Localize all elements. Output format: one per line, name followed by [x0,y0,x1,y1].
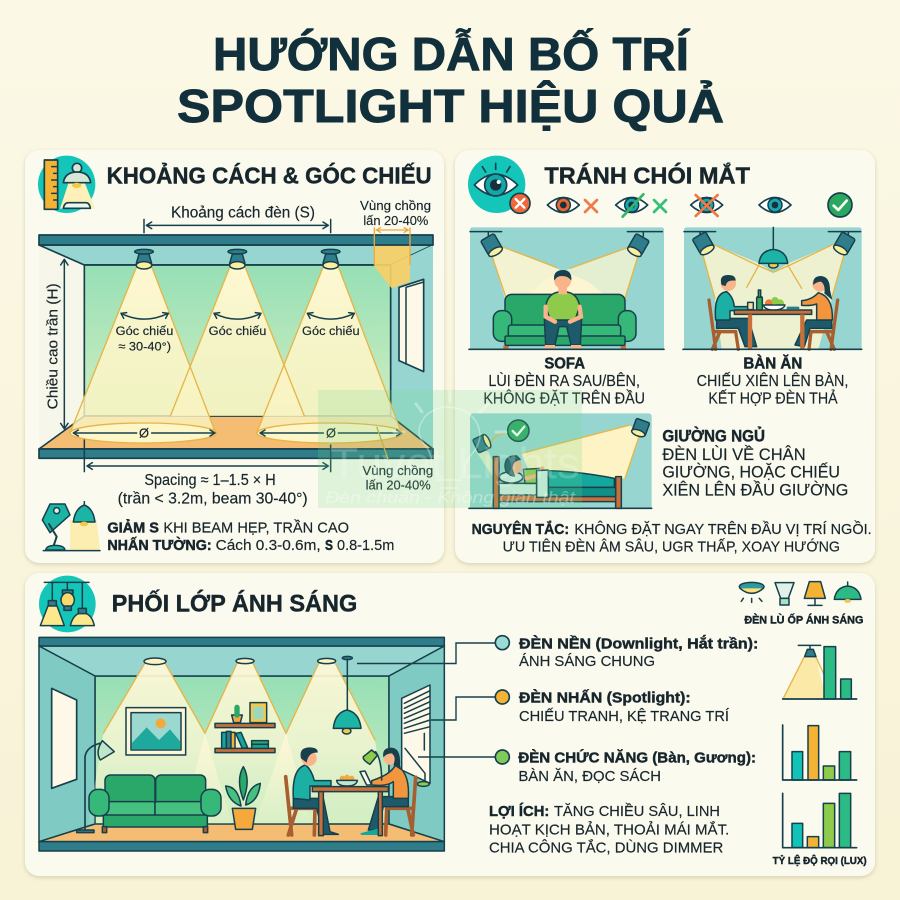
legend: đèn chức năng: ĐÈN CHỨC NĂNG (Bàn, Gương): [518,749,756,767]
rule text: ƯU TIÊN ĐÈN ÂM SÂU, UGR THẤP, XOAY HƯỚNG [503,539,840,556]
plant [226,767,260,829]
label: overlap top: Vùng chồng [360,198,431,213]
caption: dining: BÀN ĂN [743,355,802,372]
bed [493,456,621,508]
arrow: overlap width [374,227,410,265]
arrow: spacing [84,440,331,472]
left diner [715,275,757,347]
label: overlap bottom [362,463,433,492]
right window with blinds [402,685,430,786]
watermark [318,390,582,508]
caption: dining [697,355,848,407]
eye status row [547,193,852,217]
legend: đèn nhấn: ĐÈN NHẤN (Spotlight): [519,690,691,707]
icon: eye warning [468,156,530,213]
caption: bedroom [662,427,848,500]
label: overlap top: lấn 20-40% [363,213,428,228]
sofa [89,775,221,833]
note text: NHẤN TƯỜNG: [107,536,212,554]
right diner [795,276,832,347]
rule text: KHÔNG ĐẶT NGAY TRÊN ĐẦU VỊ TRÍ NGỒI. [574,520,872,538]
chart: downlight with bars [783,645,857,699]
person on sofa [544,270,582,349]
painting [126,708,186,755]
legend: đèn nền: ÁNH SÁNG CHUNG [519,653,655,670]
room diagram [39,235,433,458]
chart: lux ratio bars [783,793,857,848]
note text [107,519,394,554]
legend: đèn chức năng: BÀN ĂN, ĐỌC SÁCH [518,768,661,785]
beam angle labels [116,324,360,354]
caption: dining: KẾT HỢP ĐÈN THẢ [708,390,838,407]
caption: dining: CHIẾU XIÊN LÊN BÀN, [697,373,848,390]
label: overlap bottom: lấn 20-40% [366,477,431,492]
beam angle labels: Góc chiếu [302,324,360,338]
label: overlap bottom: Vùng chồng [362,463,433,478]
benefits text: TĂNG CHIỀU SÂU, LINH [554,803,720,820]
arrow: spacing S [144,219,331,233]
title: SPOTLIGHT HIỆU QUẢ [177,80,724,132]
shelves [215,703,275,753]
title [177,28,724,132]
heading: TRÁNH CHÓI MẮT [544,161,750,188]
beams [70,267,403,443]
caption: bedroom: ĐÈN LÙI VỀ CHÂN [662,445,806,464]
note text: KHI BEAM HẸP, TRẦN CAO [163,519,349,536]
spotlights [135,249,340,269]
icons: lamp types [739,582,861,605]
floor lamp [77,741,114,833]
legend: đèn chức năng [495,749,756,785]
label: khoảng cách đèn: Khoảng cách đèn (S) [171,205,315,222]
dining group [286,747,416,836]
icon: pendant lamps [39,576,96,632]
panel: tránh chói mắt [455,150,875,563]
scene: bedroom [469,413,652,508]
panel: phối lớp ánh sáng [25,573,875,876]
table with bowl and lamp [312,750,388,836]
legend: đèn nhấn: CHIẾU TRANH, KỆ TRANG TRÍ [519,708,730,725]
caption: sofa: SOFA [544,355,585,372]
watermark: Tuvet Lights [330,439,580,488]
scene: dining table [683,227,862,349]
legend: đèn nhấn [495,690,730,725]
note text: GIẢM S [107,519,159,536]
beam angle labels: ≈ 30-40°) [118,340,171,354]
label: ceiling height: Chiều cao trần (H) [46,283,62,409]
room illustration [39,637,444,851]
icon: ruler and lamp [38,156,95,213]
benefits text: CHIA CÔNG TẮC, DÙNG DIMMER [489,839,724,857]
label: spacing formula: (trần < 3.2m, beam 30-40°) [118,490,308,507]
caption: sofa: KHÔNG ĐẶT TRÊN ĐẦU [483,390,645,407]
caption: bedroom: GIƯỜNG, HOẶC CHIẾU [662,463,840,482]
left window [52,688,77,788]
beam angle labels: Góc chiếu [209,324,266,338]
rule text: NGUYÊN TẮC: [472,520,569,538]
legend: đèn nền [495,634,758,670]
heading: PHỐI LỚP ÁNH SÁNG [112,590,357,618]
benefits text: HOẠT KỊCH BẢN, THOẢI MÁI MẮT. [489,820,729,838]
label: spacing formula: Spacing ≈ 1–1.5 × H [144,472,276,489]
icon legend caption: ĐÈN LÙ ỐP ÁNH SÁNG [744,612,863,626]
chart: layered bars [783,725,857,780]
heading: KHOẢNG CÁCH & GÓC CHIẾU [107,160,432,188]
caption: bedroom: XIÊN LÊN ĐẦU GIƯỜNG [662,481,848,500]
rule text [472,520,872,556]
chart caption: TỶ LỆ ĐỘ RỌI (LUX) [773,854,867,867]
table with food [734,290,812,349]
chairs [709,300,738,349]
label: spacing formula [118,472,308,507]
caption: sofa [483,355,645,407]
icon: desk lamp and pendant [42,502,100,551]
check badge [508,420,529,441]
connector lines [357,643,495,757]
watermark: Đèn chuẩn - Không gian thật [325,488,576,507]
benefits text [489,803,729,857]
panel: khoảng cách & góc chiếu [25,150,444,563]
scene: sofa [469,227,664,349]
overlap leader [377,427,388,460]
legend: đèn nền: ĐÈN NỀN (Downlight, Hắt trần): [519,634,758,652]
note text: S [325,538,333,554]
title: HƯỚNG DẪN BỐ TRÍ [213,28,690,80]
window [399,279,424,372]
benefits text: LỢI ÍCH: [489,803,549,820]
floor diameter arrows [73,426,402,440]
caption: sofa: LÙI ĐÈN RA SAU/BÊN, [488,373,640,390]
beam angle labels: Góc chiếu [116,324,173,338]
beam angle arrows [121,313,354,319]
pendant lamp [333,656,361,734]
note text: Cách 0.3-0.6m, [216,538,321,554]
caption: bedroom: GIƯỜNG NGỦ [662,427,765,446]
label: overlap top [360,198,431,228]
ceiling light beams [88,658,388,824]
floor diameter arrows: Ø [139,426,149,440]
arrow: ceiling height H [61,259,68,429]
floor diameter arrows: Ø [326,426,336,440]
note text: 0.8-1.5m [337,538,394,554]
